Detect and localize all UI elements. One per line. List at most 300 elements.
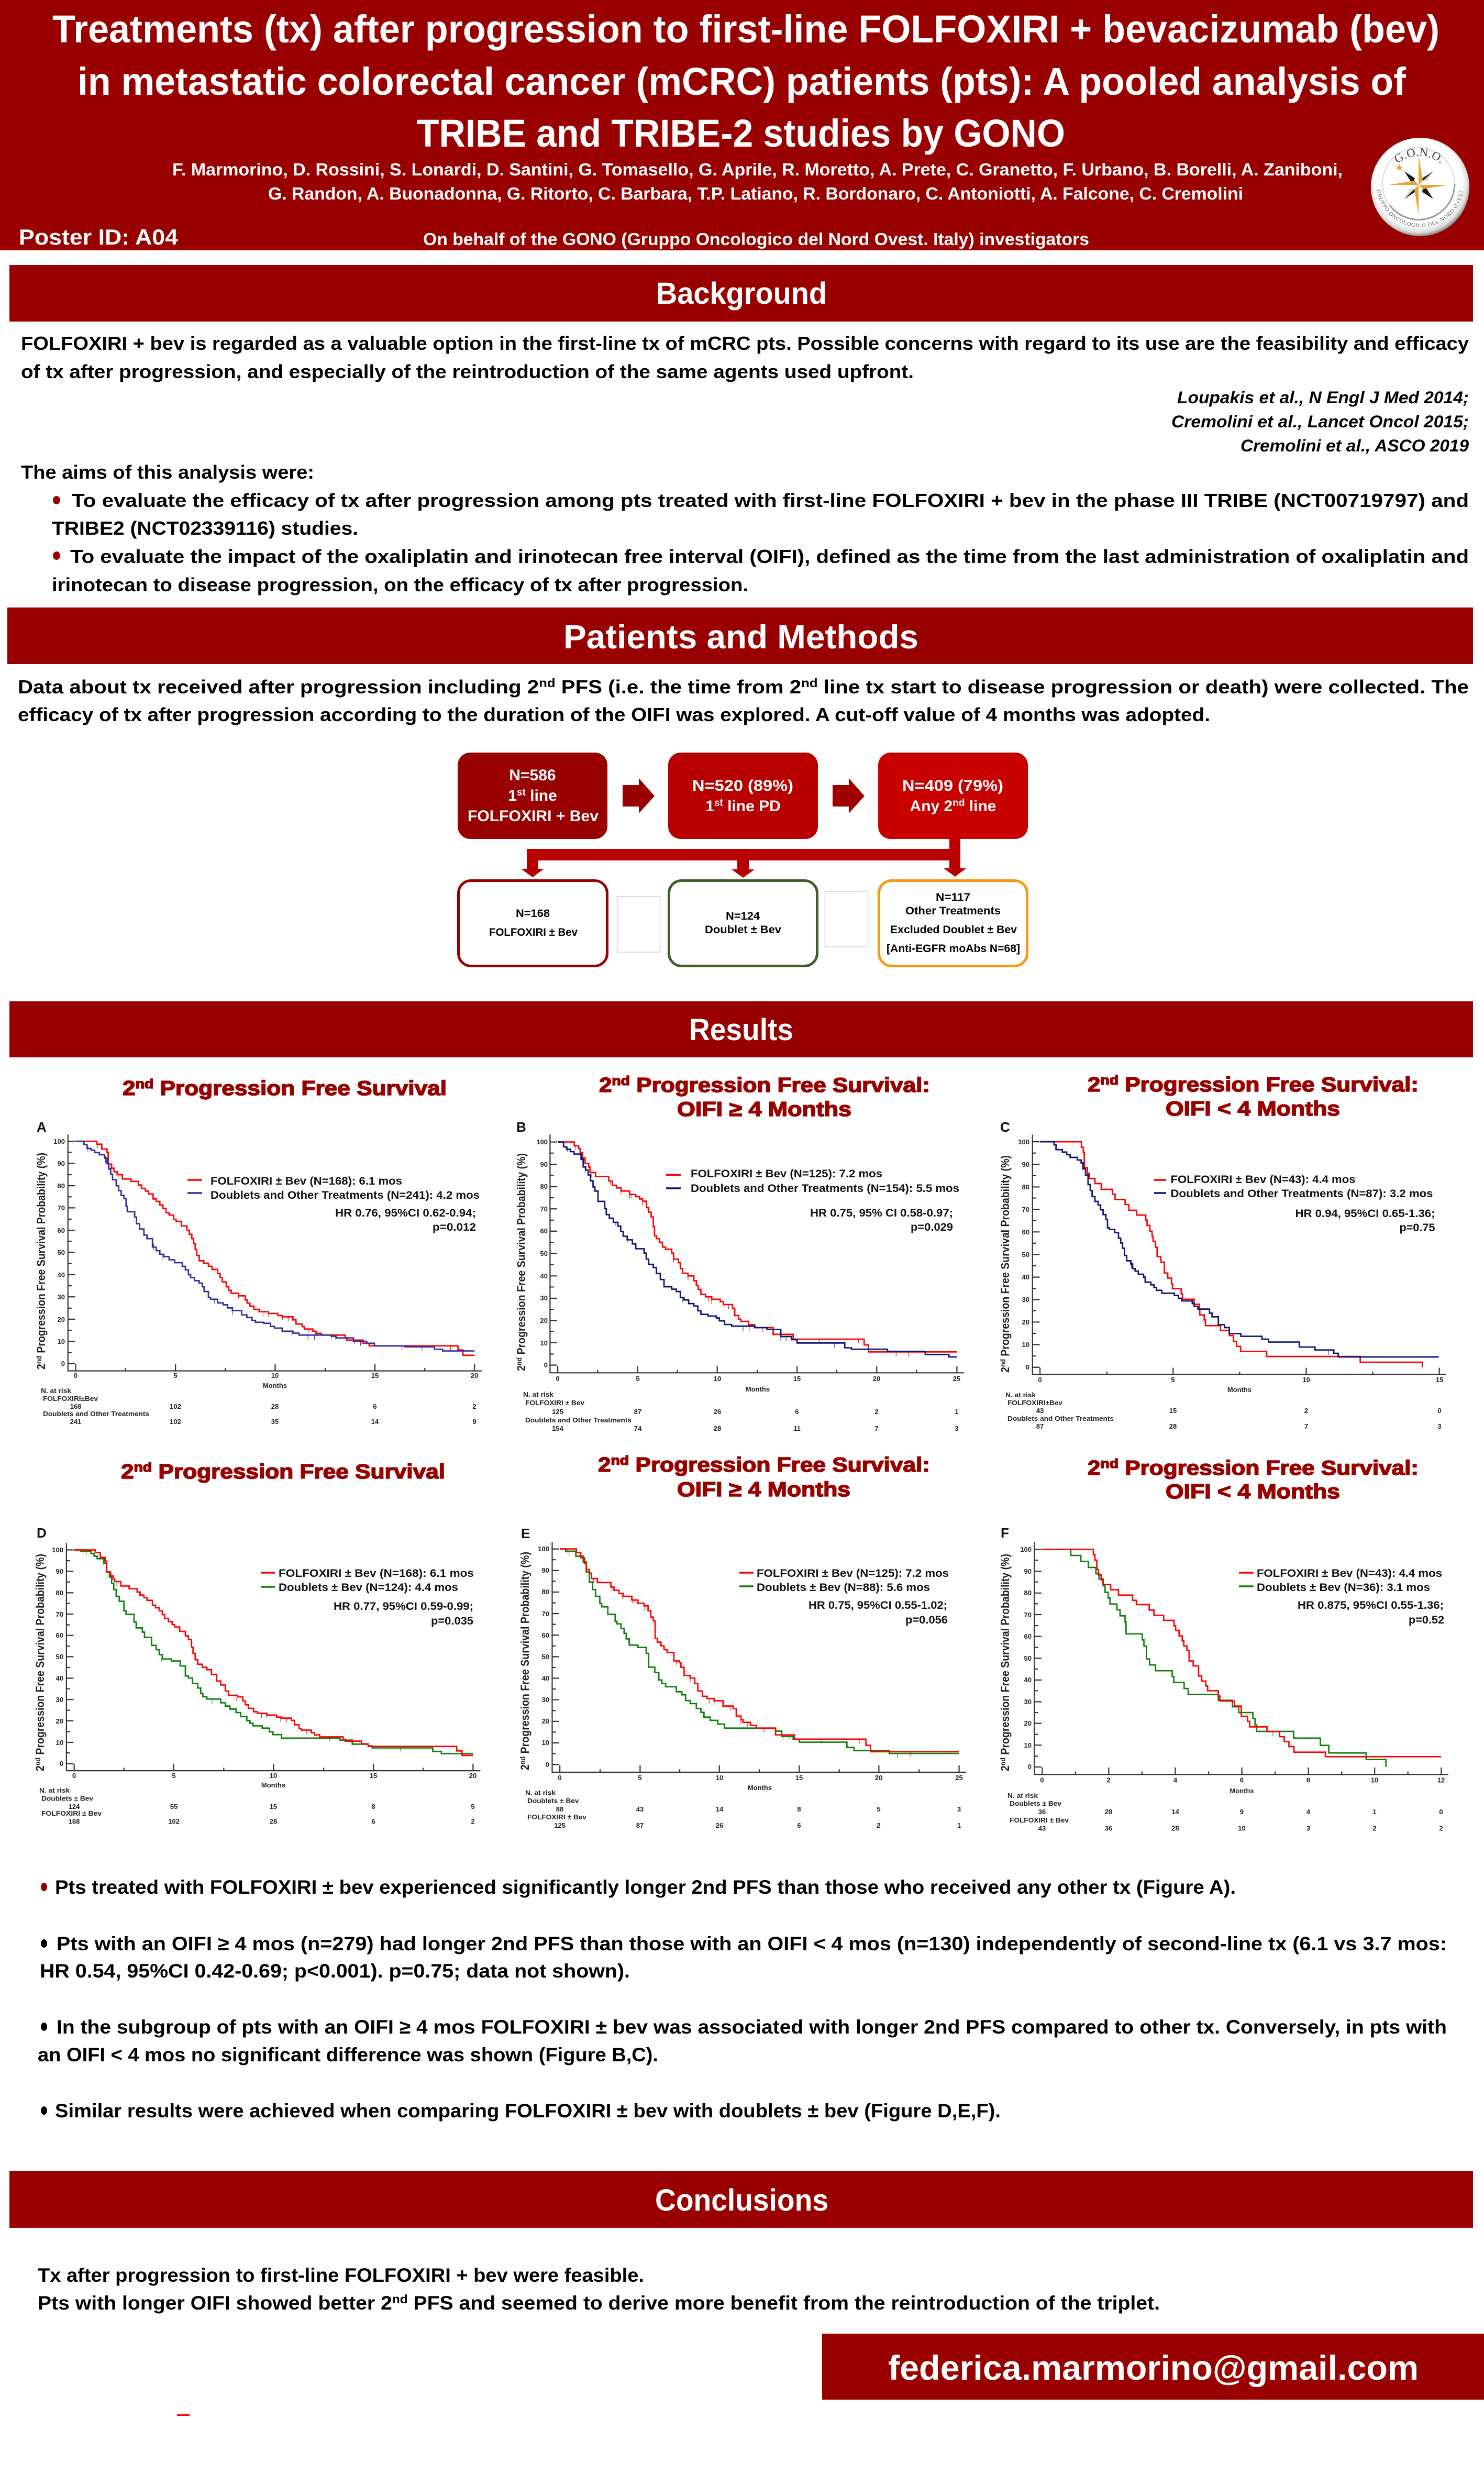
- results findings text: Pts treated with FOLFOXIRI ± bev experienced significantly longer 2nd PFS than those who received any other tx (Figure A).: [55, 1876, 1236, 1898]
- y tick labels: 30: [1022, 1296, 1029, 1304]
- icon: GONO logo: G.O.N.O.: [1395, 148, 1441, 163]
- x tick labels and number at risk: Doublets ± Bev: [41, 1794, 94, 1803]
- x tick labels and number at risk: 35: [271, 1418, 279, 1426]
- x tick labels and number at risk: 5: [877, 1805, 881, 1813]
- chart title F: [1088, 1456, 1419, 1503]
- x tick labels and number at risk: Doublets ± Bev: [1010, 1799, 1062, 1807]
- box: other treatments arm: Excluded Doublet ± Bev: [890, 924, 1017, 936]
- legend A: FOLFOXIRI ± Bev (N=168): 6.1 mos: [211, 1175, 402, 1187]
- y tick labels: 70: [1024, 1611, 1032, 1619]
- x tick labels and number at risk: N. at risk: [1005, 1391, 1036, 1399]
- legend D: p=0.035: [431, 1615, 473, 1627]
- y tick labels: [536, 1138, 548, 1369]
- y tick labels: 90: [1024, 1567, 1032, 1575]
- y axis label: Progression Free Survival Probability (%): [515, 1153, 528, 1357]
- legend B: [666, 1168, 959, 1233]
- y tick labels: 0: [546, 1761, 549, 1769]
- x tick labels and number at risk: 2: [1304, 1407, 1308, 1415]
- y axis label: nd: [34, 1758, 42, 1765]
- conclusions text: [38, 2265, 1160, 2314]
- heading: patients and methods: Patients and Methods: [563, 618, 918, 656]
- y tick labels: 0: [544, 1361, 548, 1369]
- y tick labels: 30: [58, 1293, 65, 1301]
- methods paragraph: line tx start to disease progression or death) were collected. The: [818, 676, 1469, 698]
- y tick labels: 60: [1024, 1632, 1032, 1640]
- chart title E: Progression Free Survival:: [629, 1454, 930, 1476]
- x tick labels and number at risk: 5: [172, 1772, 176, 1780]
- on behalf line: On behalf of the GONO (Gruppo Oncologico del Nord Ovest. Italy) investigators: [423, 229, 1089, 249]
- stray red dash: [177, 2414, 190, 2416]
- legend C: [1154, 1174, 1435, 1234]
- box: N=586: [458, 753, 607, 839]
- x tick labels and number at risk: 10: [1302, 1376, 1310, 1384]
- poster id: Poster ID: A04: [19, 225, 179, 249]
- y tick labels: 80: [56, 1589, 63, 1597]
- y axis label: nd: [518, 1757, 527, 1764]
- chart title B: Progression Free Survival:: [630, 1074, 930, 1097]
- y tick labels: 80: [542, 1588, 549, 1596]
- box: N=520: line PD: [723, 798, 781, 815]
- y tick labels: [53, 1137, 65, 1367]
- box: N=586: 1: [508, 787, 517, 804]
- legend D: [261, 1567, 474, 1627]
- box: other treatments arm: N=117: [936, 891, 970, 903]
- x tick labels and number at risk: 3: [957, 1805, 961, 1813]
- legend E: [739, 1567, 949, 1626]
- x tick labels and number at risk: 0: [1038, 1376, 1042, 1384]
- y tick labels: 90: [58, 1159, 65, 1167]
- y tick labels: 10: [58, 1338, 65, 1345]
- y tick labels: 50: [540, 1250, 548, 1257]
- survival plot A: [68, 1134, 482, 1371]
- x tick labels and number at risk: [525, 1774, 963, 1829]
- title: Treatments (tx) after progression to first-line FOLFOXIRI + bevacizumab (bev): [52, 7, 1439, 51]
- box: N=409: line: [965, 798, 996, 815]
- y tick labels: 70: [542, 1610, 549, 1618]
- heading: conclusions: [9, 2171, 1473, 2228]
- chart title D: Progression Free Survival: [152, 1461, 445, 1483]
- y axis label: Progression Free Survival Probability (%): [518, 1552, 531, 1757]
- y tick labels: 20: [542, 1717, 549, 1725]
- x tick labels and number at risk: 11: [793, 1424, 801, 1432]
- references: Cremolini et al., Lancet Oncol 2015;: [1171, 412, 1469, 431]
- x tick labels and number at risk: Doublets and Other Treatments: [1007, 1415, 1114, 1422]
- x tick labels and number at risk: [41, 1372, 478, 1426]
- y axis label: Progression Free Survival Probability (%): [999, 1155, 1012, 1359]
- y tick labels: 20: [56, 1717, 63, 1725]
- x tick labels and number at risk: 0: [558, 1774, 562, 1782]
- x tick labels and number at risk: 15: [793, 1375, 801, 1383]
- heading: conclusions: Conclusions: [655, 2183, 828, 2217]
- ghost box: [825, 891, 868, 947]
- x tick labels and number at risk: FOLFOXIRI±Bev: [43, 1395, 98, 1402]
- x tick labels and number at risk: 88: [556, 1805, 563, 1813]
- legend F: Doublets ± Bev (N=36): 3.1 mos: [1257, 1582, 1430, 1594]
- legend D: FOLFOXIRI ± Bev (N=168): 6.1 mos: [279, 1567, 474, 1580]
- panel letter E: E: [521, 1526, 530, 1541]
- y tick labels: 0: [1028, 1763, 1032, 1771]
- box: N=409: Any 2: [910, 798, 953, 815]
- chart title C: Progression Free Survival:: [1118, 1074, 1419, 1096]
- x tick labels and number at risk: 2: [472, 1402, 477, 1410]
- x tick labels and number at risk: 1: [955, 1408, 959, 1416]
- y axis label: nd: [999, 1359, 1007, 1367]
- y tick labels: 50: [1024, 1654, 1032, 1662]
- panel letter D: D: [37, 1525, 47, 1541]
- x tick labels and number at risk: 2: [1372, 1825, 1377, 1832]
- x tick labels and number at risk: N. at risk: [523, 1390, 554, 1398]
- legend F: FOLFOXIRI ± Bev (N=43): 4.4 mos: [1257, 1567, 1442, 1580]
- x tick labels and number at risk: 15: [795, 1774, 803, 1782]
- y tick labels: 50: [56, 1653, 63, 1661]
- x tick labels and number at risk: 1: [957, 1821, 961, 1829]
- x tick labels and number at risk: Doublets ± Bev: [527, 1797, 579, 1805]
- x tick labels and number at risk: 0: [72, 1772, 76, 1780]
- x tick labels and number at risk: 125: [552, 1408, 563, 1416]
- legend C: Doublets and Other Treatments (N=87): 3.2 mos: [1171, 1188, 1433, 1200]
- box: other treatments arm: [Anti-EGFR moAbs N=68]: [887, 943, 1020, 955]
- x tick labels and number at risk: 6: [795, 1408, 799, 1416]
- y axis label: 2: [34, 1765, 47, 1771]
- aims: TRIBE2 (NCT02339116) studies.: [52, 517, 358, 539]
- x tick labels and number at risk: 20: [469, 1772, 477, 1780]
- legend E: Doublets ± Bev (N=88): 5.6 mos: [757, 1582, 930, 1594]
- legend A: Doublets and Other Treatments (N=241): 4.2 mos: [211, 1189, 480, 1201]
- methods paragraph: PFS (i.e. the time from 2: [556, 676, 801, 698]
- chart title F: 2: [1088, 1457, 1099, 1479]
- chart title F: OIFI < 4 Months: [1166, 1481, 1340, 1503]
- y tick labels: 30: [540, 1294, 548, 1302]
- references: [1171, 388, 1469, 455]
- chart title C: [1088, 1073, 1419, 1120]
- aims: To evaluate the efficacy of tx after progression among pts treated with first-line FOLFOXIRI + bev in the phase III TRIBE (NCT00719797) and: [72, 490, 1469, 511]
- y tick labels: 30: [56, 1696, 63, 1704]
- chart title E: 2: [598, 1454, 610, 1476]
- y tick labels: 80: [58, 1182, 65, 1190]
- methods paragraph: Data about tx received after progression including 2: [18, 676, 484, 698]
- y tick labels: [538, 1545, 549, 1769]
- y axis label: nd: [515, 1357, 523, 1365]
- y tick labels: 40: [540, 1272, 548, 1280]
- x tick labels and number at risk: [1007, 1776, 1445, 1832]
- x tick labels and number at risk: FOLFOXIRI ± Bev: [525, 1399, 585, 1407]
- box: N=409: nd: [953, 798, 965, 809]
- chart title B: nd: [612, 1074, 630, 1088]
- methods paragraph: [18, 676, 1469, 725]
- header banner: [0, 0, 1484, 250]
- x tick labels and number at risk: 15: [370, 1772, 377, 1780]
- legend F: p=0.52: [1409, 1614, 1444, 1626]
- panel: patients and methods: [7, 608, 1473, 966]
- x tick labels and number at risk: 15: [270, 1803, 277, 1810]
- x tick labels and number at risk: 0: [1437, 1407, 1442, 1415]
- chart title C: OIFI < 4 Months: [1166, 1098, 1340, 1120]
- legend B: p=0.029: [911, 1221, 953, 1233]
- y tick labels: 100: [52, 1546, 63, 1554]
- x tick labels and number at risk: 14: [716, 1805, 724, 1813]
- x tick labels and number at risk: 4: [1306, 1808, 1311, 1816]
- x tick labels and number at risk: Months: [748, 1784, 772, 1792]
- y tick labels: 60: [58, 1227, 65, 1234]
- x tick labels and number at risk: N. at risk: [525, 1789, 556, 1796]
- heading: results: [9, 1001, 1473, 1057]
- x tick labels and number at risk: 14: [1171, 1808, 1179, 1816]
- survival plot D: [67, 1543, 480, 1771]
- y tick labels: 0: [61, 1360, 65, 1367]
- x tick labels and number at risk: 28: [1171, 1825, 1179, 1832]
- y axis label: 2: [999, 1765, 1012, 1771]
- x tick labels and number at risk: 241: [70, 1418, 81, 1426]
- y tick labels: 80: [1024, 1589, 1032, 1597]
- x tick labels and number at risk: N. at risk: [41, 1387, 72, 1395]
- x tick labels and number at risk: 3: [1306, 1825, 1310, 1832]
- conclusions text: PFS and seemed to derive more benefit from the reintroduction of the triplet.: [408, 2292, 1160, 2314]
- x tick labels and number at risk: 25: [953, 1375, 960, 1383]
- panel letter B: B: [516, 1119, 526, 1135]
- chart title A: nd: [136, 1077, 153, 1091]
- y tick labels: 10: [542, 1739, 549, 1747]
- y tick labels: 20: [1022, 1318, 1029, 1326]
- results findings text: In the subgroup of pts with an OIFI ≥ 4 mos FOLFOXIRI ± bev was associated with longer 2nd PFS compared to other tx. Conversely, in pts with: [57, 2016, 1447, 2038]
- x tick labels and number at risk: 0: [74, 1372, 77, 1379]
- y tick labels: 10: [56, 1739, 63, 1747]
- box: FOLFOXIRI arm: [459, 881, 607, 966]
- x tick labels and number at risk: 10: [271, 1372, 279, 1379]
- y tick labels: 100: [536, 1138, 548, 1146]
- title: [52, 7, 1439, 155]
- y tick labels: 50: [58, 1249, 65, 1256]
- y tick labels: [1018, 1138, 1029, 1371]
- x tick labels and number at risk: 28: [714, 1424, 721, 1432]
- legend C: HR 0.94, 95%CI 0.65-1.36;: [1295, 1208, 1435, 1220]
- x tick labels and number at risk: Doublets and Other Treatments: [525, 1416, 632, 1424]
- y tick labels: 90: [540, 1161, 548, 1168]
- chart title B: 2: [599, 1074, 611, 1097]
- results findings text: [38, 1876, 1447, 2122]
- y axis label: 2: [515, 1365, 528, 1371]
- panel letter F: F: [1001, 1525, 1009, 1541]
- x tick labels and number at risk: N. at risk: [39, 1786, 70, 1794]
- y tick labels: 60: [542, 1631, 549, 1639]
- x tick labels and number at risk: 87: [1036, 1422, 1044, 1430]
- y tick labels: 40: [542, 1674, 549, 1682]
- box: N=520: N=520 (89%): [692, 777, 793, 794]
- x tick labels and number at risk: Months: [263, 1382, 287, 1389]
- x tick labels and number at risk: 10: [1238, 1825, 1246, 1832]
- box: N=520: st: [714, 798, 723, 809]
- x tick labels and number at risk: 102: [168, 1817, 180, 1826]
- y axis label: Progression Free Survival Probability (%): [35, 1153, 48, 1356]
- box: N=586: line: [526, 787, 557, 804]
- box: N=586: st: [517, 787, 526, 798]
- box: doublet arm: [669, 881, 817, 966]
- icon: GONO logo: GRUPPO ONCOLOGICO DEL NORD OVEST: [1377, 190, 1464, 227]
- x tick labels and number at risk: 9: [472, 1418, 477, 1426]
- legend E: p=0.056: [905, 1614, 948, 1626]
- panel: background: [9, 265, 1473, 595]
- background paragraph: FOLFOXIRI + bev is regarded as a valuable option in the first-line tx of mCRC pts. Possible concerns with regard to its use are the feasibility and efficacy: [21, 333, 1469, 354]
- y tick labels: 10: [1022, 1341, 1029, 1349]
- chart C: [999, 1073, 1446, 1430]
- heading: background: Background: [656, 277, 827, 311]
- legend D: Doublets ± Bev (N=124): 4.4 mos: [279, 1582, 458, 1594]
- y tick labels: [1020, 1545, 1032, 1771]
- branching connector: [521, 837, 966, 878]
- legend A: HR 0.76, 95%CI 0.62-0.94;: [335, 1207, 476, 1219]
- x tick labels and number at risk: [523, 1375, 960, 1432]
- methods paragraph: nd: [801, 676, 818, 690]
- x tick labels and number at risk: 87: [636, 1821, 644, 1829]
- y tick labels: 80: [1022, 1183, 1029, 1191]
- icon: GONO logo: [1371, 138, 1469, 236]
- y tick labels: 60: [56, 1631, 63, 1639]
- chart title E: [598, 1453, 930, 1501]
- y tick labels: 90: [56, 1567, 63, 1575]
- y tick labels: 60: [540, 1227, 548, 1235]
- box: N=586: N=586: [509, 767, 556, 784]
- x tick labels and number at risk: 5: [173, 1372, 178, 1379]
- legend F: [1239, 1567, 1444, 1626]
- y tick labels: 60: [1022, 1228, 1029, 1236]
- y tick labels: 70: [56, 1610, 63, 1618]
- chart title B: OIFI ≥ 4 Months: [677, 1098, 851, 1121]
- aims: [21, 461, 1469, 595]
- y tick labels: [52, 1546, 63, 1768]
- background paragraph: of tx after progression, and especially of the reintroduction of the same agents used upfront.: [21, 361, 914, 382]
- references: Loupakis et al., N Engl J Med 2014;: [1177, 388, 1469, 407]
- x tick labels and number at risk: 20: [471, 1372, 478, 1379]
- chart D: [34, 1460, 480, 1826]
- panel: results: [9, 1001, 1473, 2122]
- legend A: p=0.012: [433, 1221, 476, 1233]
- chart B: [515, 1074, 965, 1432]
- arrow: [833, 778, 865, 813]
- legend A: [187, 1175, 480, 1233]
- conclusions text: Pts with longer OIFI showed better 2: [38, 2292, 372, 2314]
- y tick labels: 50: [1022, 1251, 1029, 1258]
- box: N=409: N=409 (79%): [902, 777, 1003, 794]
- x tick labels and number at risk: 36: [1105, 1825, 1112, 1832]
- y tick labels: 70: [540, 1205, 548, 1213]
- y tick labels: 100: [1020, 1545, 1032, 1553]
- chart title E: nd: [611, 1453, 629, 1468]
- x tick labels and number at risk: 15: [1169, 1407, 1177, 1415]
- box: other treatments arm: Other Treatments: [905, 905, 1001, 917]
- y tick labels: 90: [1022, 1161, 1029, 1168]
- y tick labels: 100: [538, 1545, 549, 1553]
- x tick labels and number at risk: 43: [1036, 1407, 1044, 1415]
- authors: G. Randon, A. Buonadonna, G. Ritorto, C. Barbara, T.P. Latiano, R. Bordonaro, C. Antoniotti, A. Falcone, C. Cremolini: [268, 184, 1243, 203]
- y tick labels: 70: [1022, 1206, 1029, 1213]
- contact email: federica.marmorino@gmail.com: [888, 2348, 1419, 2387]
- box: FOLFOXIRI arm: N=168: [516, 908, 550, 920]
- y tick labels: 100: [1018, 1138, 1029, 1146]
- x tick labels and number at risk: 5: [636, 1375, 640, 1383]
- x tick labels and number at risk: FOLFOXIRI ± Bev: [1010, 1816, 1069, 1824]
- x tick labels and number at risk: 26: [714, 1408, 721, 1416]
- y axis label: Progression Free Survival Probability (%): [34, 1554, 47, 1758]
- x tick labels and number at risk: 5: [638, 1774, 642, 1782]
- legend E: FOLFOXIRI ± Bev (N=125): 7.2 mos: [757, 1567, 949, 1580]
- box: doublet arm: Doublet ± Bev: [705, 924, 781, 936]
- x tick labels and number at risk: FOLFOXIRI±Bev: [1007, 1399, 1063, 1407]
- x tick labels and number at risk: [39, 1772, 477, 1826]
- x tick labels and number at risk: 0: [1439, 1808, 1443, 1816]
- conclusions text: nd: [392, 2292, 408, 2306]
- y tick labels: 40: [56, 1674, 63, 1682]
- x tick labels and number at risk: 14: [371, 1418, 379, 1426]
- x tick labels and number at risk: 2: [471, 1817, 475, 1826]
- x tick labels and number at risk: 12: [1437, 1776, 1445, 1784]
- authors: [172, 160, 1343, 203]
- x tick labels and number at risk: FOLFOXIRI ± Bev: [41, 1809, 102, 1817]
- chart A: [35, 1077, 482, 1426]
- y tick labels: 10: [1024, 1741, 1032, 1749]
- results findings text: Pts with an OIFI ≥ 4 mos (n=279) had longer 2nd PFS than those with an OIFI < 4 mos (n=130) independently of second-line tx (6.1 vs 3.7 mos:: [57, 1933, 1447, 1954]
- y axis label: 2: [999, 1366, 1012, 1373]
- x tick labels and number at risk: [1005, 1376, 1443, 1430]
- survival plot F: [1034, 1542, 1448, 1774]
- chart title C: nd: [1101, 1073, 1118, 1088]
- box: N=586: FOLFOXIRI + Bev: [468, 808, 599, 825]
- x tick labels and number at risk: 3: [955, 1424, 959, 1432]
- contact email: [822, 2334, 1484, 2400]
- x tick labels and number at risk: 26: [716, 1821, 723, 1829]
- y axis label: nd: [35, 1356, 43, 1364]
- x tick labels and number at risk: 28: [271, 1402, 279, 1410]
- x tick labels and number at risk: 10: [714, 1375, 721, 1383]
- x tick labels and number at risk: 6: [371, 1817, 375, 1826]
- x tick labels and number at risk: 0: [1040, 1776, 1044, 1784]
- x tick labels and number at risk: 168: [70, 1402, 81, 1410]
- x tick labels and number at risk: 102: [170, 1402, 181, 1410]
- y axis label: nd: [999, 1758, 1007, 1765]
- survival plot B: [550, 1134, 965, 1373]
- references: Cremolini et al., ASCO 2019: [1241, 436, 1469, 455]
- authors: F. Marmorino, D. Rossini, S. Lonardi, D. Santini, G. Tomasello, G. Aprile, R. Moretto, A. Prete, C. Granetto, F. Urbano, B. Borelli, A. Zaniboni,: [172, 160, 1343, 179]
- legend B: FOLFOXIRI ± Bev (N=125): 7.2 mos: [691, 1168, 882, 1180]
- x tick labels and number at risk: N. at risk: [1007, 1792, 1038, 1799]
- chart title A: 2: [123, 1077, 134, 1100]
- x tick labels and number at risk: 25: [955, 1774, 963, 1782]
- chart title D: nd: [134, 1460, 152, 1475]
- y tick labels: 0: [60, 1760, 63, 1768]
- chart F: [999, 1456, 1448, 1832]
- x tick labels and number at risk: Months: [261, 1781, 285, 1789]
- x tick labels and number at risk: 20: [875, 1774, 882, 1782]
- y tick labels: 10: [540, 1339, 548, 1347]
- y tick labels: 40: [1024, 1676, 1032, 1684]
- x tick labels and number at risk: 0: [556, 1375, 560, 1383]
- chart title D: 2: [121, 1461, 132, 1483]
- x tick labels and number at risk: 2: [1439, 1825, 1443, 1832]
- legend B: Doublets and Other Treatments (N=154): 5.5 mos: [691, 1183, 959, 1195]
- x tick labels and number at risk: 6: [373, 1402, 377, 1410]
- heading: patients and methods: [7, 608, 1473, 664]
- ghost box: [617, 897, 660, 952]
- panel letter C: C: [1000, 1119, 1010, 1135]
- y tick labels: 30: [1024, 1698, 1032, 1706]
- x tick labels and number at risk: 4: [1173, 1776, 1178, 1784]
- title: TRIBE and TRIBE-2 studies by GONO: [417, 112, 1065, 155]
- chart title E: OIFI ≥ 4 Months: [677, 1478, 850, 1501]
- results findings text: an OIFI < 4 mos no significant difference was shown (Figure B,C).: [38, 2044, 658, 2066]
- y tick labels: 70: [58, 1204, 65, 1212]
- y tick labels: 90: [542, 1566, 549, 1574]
- legend C: p=0.75: [1399, 1222, 1435, 1234]
- box: N=520: [668, 753, 818, 839]
- x tick labels and number at risk: 9: [1240, 1808, 1244, 1816]
